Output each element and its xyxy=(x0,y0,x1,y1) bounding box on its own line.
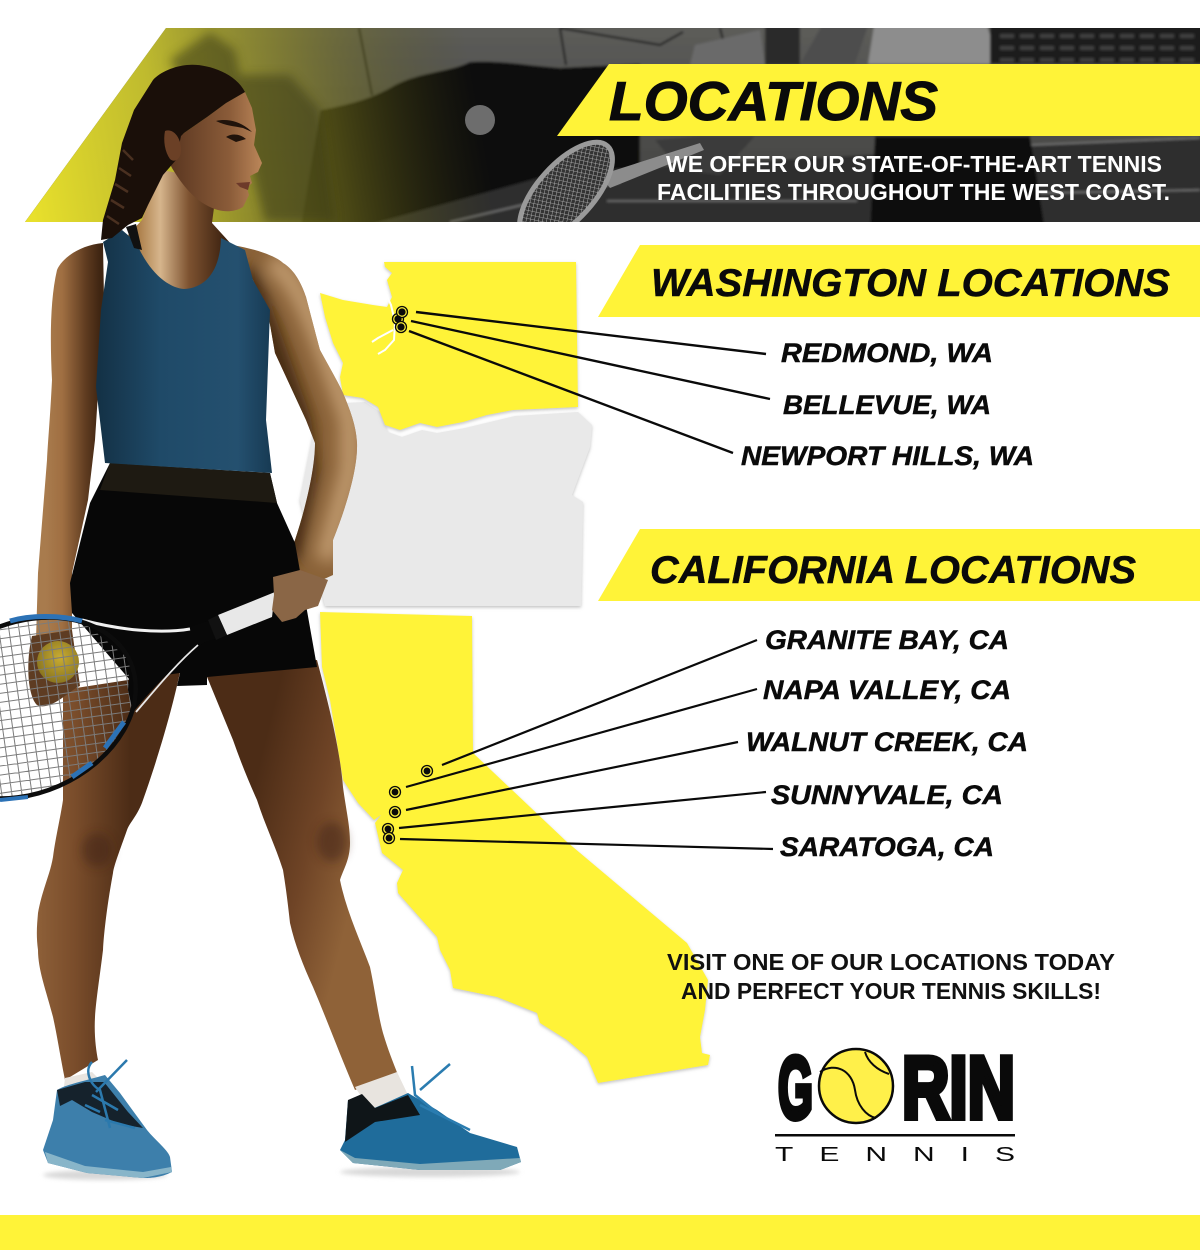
far arm xyxy=(36,243,104,640)
right shoe xyxy=(340,1064,521,1170)
racket strings xyxy=(0,620,132,796)
tree silhouettes xyxy=(170,32,335,222)
background tennis ball xyxy=(465,105,495,135)
left shoe xyxy=(43,1060,172,1178)
background player xyxy=(803,28,867,62)
logo: Gorin Tennis: TENNIS xyxy=(775,1144,1015,1166)
fingers on grip xyxy=(272,570,328,622)
tank top xyxy=(96,230,272,473)
connector lines: California xyxy=(399,640,773,849)
near arm xyxy=(236,246,358,579)
shoe shadows xyxy=(43,1167,520,1180)
throat xyxy=(82,620,225,712)
neck and chest xyxy=(128,170,232,300)
player xyxy=(0,65,521,1180)
bra strap xyxy=(126,224,142,250)
heading bar: Washington xyxy=(598,245,1200,317)
banner subtitle: WE OFFER OUR STATE-OF-THE-ART TENNIS xyxy=(666,151,1162,177)
map: Washington xyxy=(320,262,578,430)
hedge xyxy=(300,62,640,230)
map markers: California xyxy=(382,766,432,844)
location: Granite Bay: GRANITE BAY, CA xyxy=(765,625,1009,655)
location: Newport Hills: NEWPORT HILLS, WA xyxy=(741,441,1034,471)
grip xyxy=(218,592,275,635)
logo: Gorin Tennis: RIN xyxy=(902,1038,1015,1137)
footer bar xyxy=(0,1215,1200,1250)
face xyxy=(163,92,262,211)
logo: Gorin Tennis xyxy=(775,1038,1015,1166)
call to action: AND PERFECT YOUR TENNIS SKILLS! xyxy=(681,978,1101,1004)
yellow fade xyxy=(25,28,464,222)
map markers: Washington xyxy=(392,306,408,332)
banner: tennis court photo with yellow fade xyxy=(25,28,1200,222)
title: LOCATIONS xyxy=(609,70,938,132)
tennis ball in hand xyxy=(37,641,79,683)
lips xyxy=(236,182,250,190)
title bar xyxy=(557,64,1200,136)
location: Walnut Creek: WALNUT CREEK, CA xyxy=(746,727,1028,757)
left leg xyxy=(37,672,180,1080)
background racket xyxy=(517,140,704,222)
skirt xyxy=(70,463,317,686)
banner subtitle: FACILITIES THROUGHOUT THE WEST COAST. xyxy=(657,179,1170,205)
right leg xyxy=(205,660,398,1090)
heading: Washington locations: WASHINGTON LOCATIONS xyxy=(651,262,1170,305)
location: Saratoga: SARATOGA, CA xyxy=(780,832,994,862)
eye and brow xyxy=(216,120,252,142)
banner subtitle xyxy=(657,151,1170,205)
location: Napa Valley: NAPA VALLEY, CA xyxy=(763,675,1011,705)
map: Oregon xyxy=(300,400,592,606)
connector lines: Washington xyxy=(409,312,770,453)
call to action: VISIT ONE OF OUR LOCATIONS TODAY xyxy=(667,949,1115,975)
heading: California locations: CALIFORNIA LOCATIONS xyxy=(650,549,1136,592)
location: Sunnyvale: SUNNYVALE, CA xyxy=(771,780,1003,810)
heading bar: California xyxy=(598,529,1200,601)
call to action xyxy=(667,949,1115,1004)
socks xyxy=(63,1072,408,1110)
hand with ball xyxy=(28,630,80,706)
racket frame xyxy=(0,584,164,832)
waistband xyxy=(100,463,277,503)
location: Redmond: REDMOND, WA xyxy=(781,338,993,368)
map: California xyxy=(320,612,710,1083)
knee shading xyxy=(82,822,347,867)
sky poles and fence xyxy=(359,28,728,95)
location: Bellevue: BELLEVUE, WA xyxy=(783,390,991,420)
background building xyxy=(690,30,765,65)
stadium seats xyxy=(988,28,1200,64)
tennis racket xyxy=(0,592,274,802)
court surface xyxy=(376,136,1200,222)
ear xyxy=(164,130,181,161)
icon: tennis ball xyxy=(819,1049,893,1123)
logo: Gorin Tennis: G xyxy=(778,1038,813,1137)
hair and braid xyxy=(101,65,245,240)
